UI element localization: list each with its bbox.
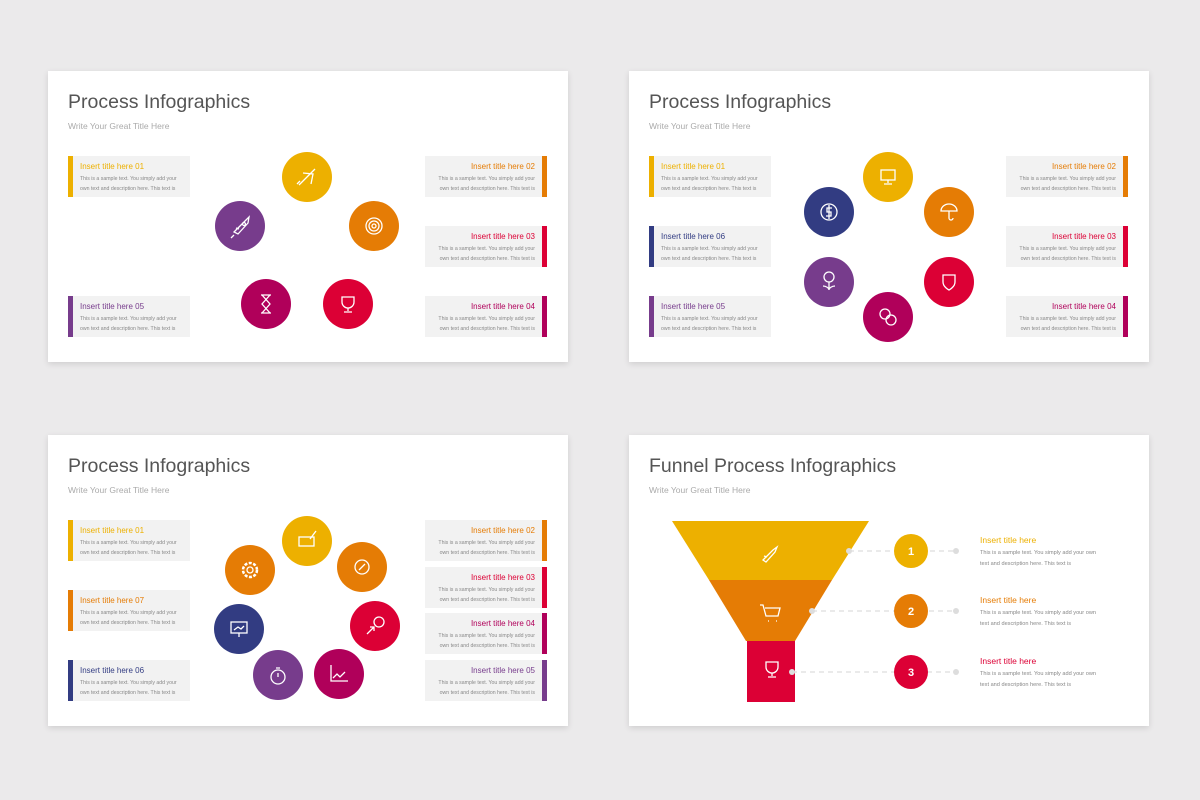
- title: Process Infographics: [649, 91, 831, 113]
- funnel stage 1: [672, 521, 869, 580]
- text box 06: Insert title here 06: [80, 666, 144, 675]
- text box 02: own text and description here. This text is: [1021, 186, 1116, 192]
- text box 01: [68, 156, 190, 197]
- subtitle: Write Your Great Title Here: [68, 485, 169, 495]
- text box 04: Insert title here 04: [471, 302, 535, 311]
- text box 03: Insert title here 03: [471, 232, 535, 241]
- text box 02: Insert title here 02: [1052, 162, 1116, 171]
- text box 03: own text and description here. This text is: [1021, 256, 1116, 262]
- circle diagram: [214, 516, 400, 700]
- text box 04: own text and description here. This text is: [1021, 326, 1116, 332]
- text box 04: [425, 296, 547, 337]
- connectors: [792, 551, 958, 672]
- panel: process 6 steps: [629, 71, 1149, 362]
- text box 01: own text and description here. This text is: [661, 186, 756, 192]
- text box 01: Insert title here 01: [661, 162, 725, 171]
- text box 05: This is a sample text. You simply add your: [80, 316, 177, 322]
- text box 01: This is a sample text. You simply add your: [661, 176, 758, 182]
- funnel stage 2: [709, 580, 832, 641]
- funnel text 2: text and description here. This text is: [980, 621, 1071, 627]
- text box 03: [1006, 226, 1128, 267]
- text box 05: This is a sample text. You simply add your: [661, 316, 758, 322]
- text box 02: [425, 520, 547, 561]
- icon circle: presentation: [214, 604, 264, 654]
- funnel text 1: text and description here. This text is: [980, 561, 1071, 567]
- text box 06: This is a sample text. You simply add your: [80, 680, 177, 686]
- icon circle: monitor: [863, 152, 913, 202]
- text box 05: own text and description here. This text is: [661, 326, 756, 332]
- icon circle: hourglass: [241, 279, 291, 329]
- text box 05: own text and description here. This text is: [440, 690, 535, 696]
- text box 03: This is a sample text. You simply add your: [1019, 246, 1116, 252]
- funnel text 2: This is a sample text. You simply add your own: [980, 610, 1096, 616]
- text box 04: own text and description here. This text is: [440, 326, 535, 332]
- icon circle: line chart: [314, 649, 364, 699]
- text box 02: own text and description here. This text is: [440, 550, 535, 556]
- text box 02: [425, 156, 547, 197]
- text box 01: [68, 520, 190, 561]
- text box 02: [1006, 156, 1128, 197]
- funnel text 3: Insert title here: [980, 656, 1036, 666]
- text box 03: Insert title here 03: [471, 573, 535, 582]
- text box 04: This is a sample text. You simply add your: [1019, 316, 1116, 322]
- text box 03: This is a sample text. You simply add your: [438, 587, 535, 593]
- icon circle: plant: [804, 257, 854, 307]
- panel: funnel: [629, 435, 1149, 726]
- text box 01: Insert title here 01: [80, 526, 144, 535]
- text box 02: own text and description here. This text is: [440, 186, 535, 192]
- text box 06: [649, 226, 771, 267]
- text box 04: [425, 613, 547, 654]
- title: Process Infographics: [68, 91, 250, 113]
- text box 02: This is a sample text. You simply add your: [438, 176, 535, 182]
- text box 04: own text and description here. This text is: [440, 643, 535, 649]
- funnel text 2: [980, 595, 1096, 627]
- title: Process Infographics: [68, 455, 250, 477]
- circle diagram: [804, 152, 974, 342]
- text box 02: Insert title here 02: [471, 162, 535, 171]
- text box 04: [1006, 296, 1128, 337]
- number 1: [894, 534, 928, 568]
- panel: process 7 steps: [48, 435, 568, 726]
- number 1: 1: [908, 546, 914, 558]
- text box 02: This is a sample text. You simply add your: [1019, 176, 1116, 182]
- subtitle: Write Your Great Title Here: [68, 121, 169, 131]
- text box 07: [68, 590, 190, 631]
- text box 03: own text and description here. This text is: [440, 597, 535, 603]
- text box 03: Insert title here 03: [1052, 232, 1116, 241]
- icon circle: dollar: [804, 187, 854, 237]
- funnel stage 3: [747, 641, 795, 702]
- number 2: 2: [908, 606, 914, 618]
- text box 05: Insert title here 05: [661, 302, 725, 311]
- icon circle: plane: [282, 152, 332, 202]
- text box 06: [68, 660, 190, 701]
- text box 04: This is a sample text. You simply add your: [438, 633, 535, 639]
- funnel text 3: This is a sample text. You simply add your own: [980, 671, 1096, 677]
- text box 05: Insert title here 05: [471, 666, 535, 675]
- text box 01: own text and description here. This text is: [80, 550, 175, 556]
- text box 05: Insert title here 05: [80, 302, 144, 311]
- text box 06: own text and description here. This text is: [80, 690, 175, 696]
- funnel diagram: [672, 521, 959, 702]
- funnel text 1: [980, 535, 1096, 567]
- number 3: [894, 655, 928, 689]
- icon circle: umbrella: [924, 187, 974, 237]
- icon circle: badge percent: [337, 542, 387, 592]
- number 3: 3: [908, 667, 914, 679]
- text box 05: [425, 660, 547, 701]
- funnel text 3: [980, 656, 1096, 688]
- text box 01: own text and description here. This text is: [80, 186, 175, 192]
- text box 06: This is a sample text. You simply add your: [661, 246, 758, 252]
- icon circle: rocket: [215, 201, 265, 251]
- funnel text 2: Insert title here: [980, 595, 1036, 605]
- text box 04: Insert title here 04: [471, 619, 535, 628]
- text box 04: This is a sample text. You simply add your: [438, 316, 535, 322]
- title: Funnel Process Infographics: [649, 455, 896, 477]
- text box 06: own text and description here. This text is: [661, 256, 756, 262]
- subtitle: Write Your Great Title Here: [649, 485, 750, 495]
- text box 01: This is a sample text. You simply add your: [80, 176, 177, 182]
- text box 01: Insert title here 01: [80, 162, 144, 171]
- icon circle: shield: [924, 257, 974, 307]
- text box 05: [68, 296, 190, 337]
- icon circle: click dollar: [350, 601, 400, 651]
- circle diagram: [215, 152, 399, 329]
- text box 03: This is a sample text. You simply add your: [438, 246, 535, 252]
- icon circle: cheque: [282, 516, 332, 566]
- text box 06: Insert title here 06: [661, 232, 725, 241]
- text box 07: own text and description here. This text is: [80, 620, 175, 626]
- icon circle: coins: [863, 292, 913, 342]
- text box 02: This is a sample text. You simply add your: [438, 540, 535, 546]
- funnel text 1: This is a sample text. You simply add your own: [980, 550, 1096, 556]
- panel: process 5 steps: [48, 71, 568, 362]
- funnel text 1: Insert title here: [980, 535, 1036, 545]
- text box 04: Insert title here 04: [1052, 302, 1116, 311]
- text box 05: [649, 296, 771, 337]
- text box 01: [649, 156, 771, 197]
- icon circle: trophy: [323, 279, 373, 329]
- text box 03: [425, 226, 547, 267]
- text box 05: This is a sample text. You simply add your: [438, 680, 535, 686]
- subtitle: Write Your Great Title Here: [649, 121, 750, 131]
- text box 01: This is a sample text. You simply add your: [80, 540, 177, 546]
- text box 07: This is a sample text. You simply add your: [80, 610, 177, 616]
- number 2: [894, 594, 928, 628]
- text box 03: own text and description here. This text is: [440, 256, 535, 262]
- icon circle: gear: [225, 545, 275, 595]
- icon circle: stopwatch: [253, 650, 303, 700]
- text box 07: Insert title here 07: [80, 596, 144, 605]
- funnel text 3: text and description here. This text is: [980, 682, 1071, 688]
- text box 03: [425, 567, 547, 608]
- text box 05: own text and description here. This text is: [80, 326, 175, 332]
- icon circle: target: [349, 201, 399, 251]
- text box 02: Insert title here 02: [471, 526, 535, 535]
